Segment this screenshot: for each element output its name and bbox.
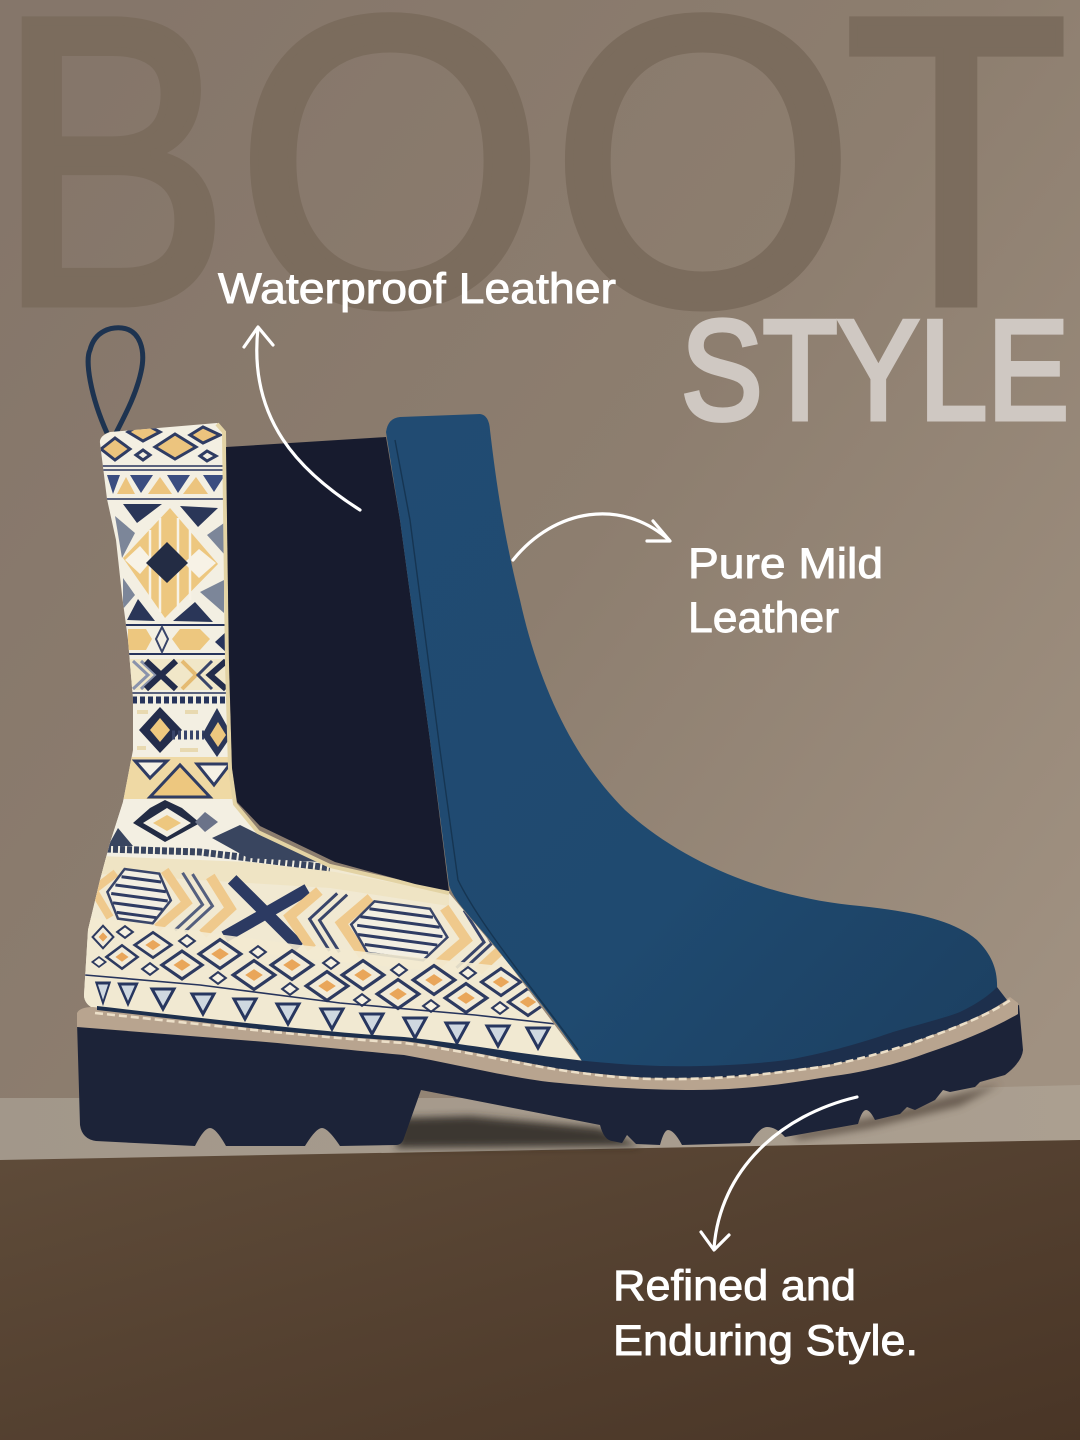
upper seam stitching [395,440,578,1050]
blue leather upper [386,414,997,1072]
heading: BOOT [0,0,1068,391]
belt divider line [85,975,565,1025]
patterned heel panel [84,423,582,1060]
band: top diamonds [101,423,220,461]
label: pure mild leather: Pure Mild [688,540,883,588]
welt stitching [95,999,1012,1079]
black elastic gusset [226,437,449,891]
welt [77,997,1018,1090]
band: dark tribal motif [100,799,340,868]
label: refined and enduring style: Refined and [613,1262,856,1310]
heel panel tan trim [217,424,449,893]
label: pure mild leather [688,540,883,642]
band: triangles [100,466,226,499]
band: diamonds [92,926,548,1016]
arrow: refined and enduring style [701,1097,857,1250]
pull loop [88,328,143,433]
outsole [77,1005,1023,1146]
band: chevrons and X [128,659,228,700]
lower panel base [84,860,582,1060]
band: triangles [96,983,549,1048]
boot [70,328,1023,1146]
label: refined and enduring style: Enduring Style. [613,1317,918,1365]
band: hexagons, chevrons and X [95,868,502,968]
arrow: waterproof leather [244,327,360,510]
platform [0,1084,1080,1440]
cream belt [100,856,449,906]
band: stepped motif [120,625,228,654]
band: small tribal motif [137,707,232,757]
band: large diamond motif [115,504,224,622]
label: waterproof leather: Waterproof Leather [218,265,616,313]
arrow: pure mild leather [513,514,670,560]
label: refined and enduring style [613,1262,918,1365]
cream belt 2 [88,917,530,980]
label: pure mild leather: Leather [688,594,839,642]
welt rim [97,987,1007,1078]
band: tan triangles [122,757,232,799]
